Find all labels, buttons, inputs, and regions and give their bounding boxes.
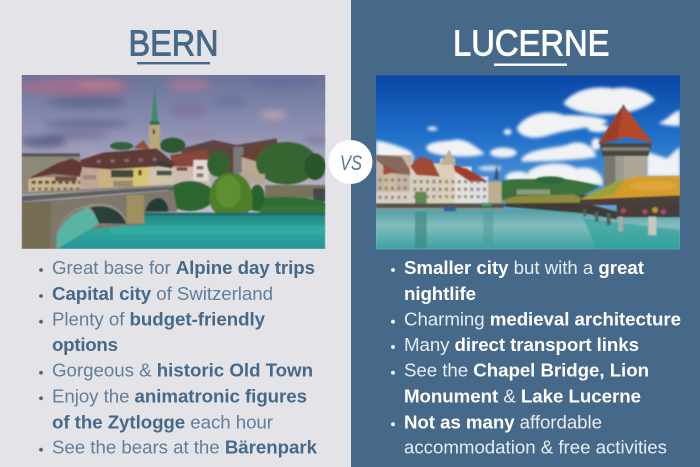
list: Lucerne highlights: nightlife	[404, 283, 476, 304]
main roofs	[27, 158, 83, 179]
panel: Bern	[22, 30, 326, 458]
bushes	[166, 181, 214, 211]
heading: Bern: BERN	[128, 22, 218, 64]
list: Bern highlights: Capital city of Switzerland	[52, 283, 273, 304]
river	[22, 213, 325, 249]
hills	[500, 177, 600, 200]
background trees	[110, 142, 133, 150]
list: Lucerne highlights: Charming medieval architecture	[404, 309, 681, 330]
VS badge: VS	[340, 152, 362, 175]
lake	[376, 209, 680, 249]
list: Bern highlights: Plenty of budget-friendly	[52, 309, 266, 330]
list: Lucerne highlights	[391, 257, 681, 458]
town buildings	[376, 155, 413, 207]
VS badge	[328, 140, 372, 184]
list: Bern highlights: options	[52, 334, 118, 355]
willow	[209, 173, 253, 217]
list: Bern highlights: Enjoy the animatronic figures	[52, 385, 307, 406]
list: Bern highlights: See the bears at the Bärenpark	[52, 437, 318, 458]
bridge	[22, 190, 177, 249]
tower	[149, 124, 160, 149]
right group	[173, 165, 210, 185]
list: Lucerne highlights: accommodation & free activities	[404, 437, 667, 458]
main facades	[28, 177, 82, 194]
list: Bern highlights: of the Zytlogge each hour	[52, 411, 273, 432]
bridge piers	[648, 217, 656, 235]
list: Lucerne highlights: Many direct transport links	[404, 334, 639, 355]
list: Bern highlights: Great base for Alpine day trips	[52, 257, 315, 278]
list: Bern highlights: Gorgeous & historic Old Town	[52, 360, 313, 381]
back buildings	[180, 138, 280, 175]
tower	[614, 155, 625, 182]
list: Lucerne highlights: Smaller city but with a great	[404, 257, 644, 278]
big trees	[207, 151, 230, 177]
panel: Lucerne	[351, 0, 700, 467]
far wall	[22, 155, 80, 192]
photo: Bern old town and river	[17, 75, 330, 249]
list: Lucerne highlights: See the Chapel Bridge, Lion	[404, 360, 649, 381]
list: Lucerne highlights: Not as many affordable	[404, 411, 602, 432]
near covered bridge	[580, 195, 680, 205]
photo: Lucerne Chapel Bridge and lake	[376, 75, 680, 249]
long covered bridge	[505, 194, 583, 204]
heading: Lucerne: LUCERNE	[453, 22, 610, 64]
heading underline: Bern	[137, 62, 210, 64]
heading underline: Lucerne	[494, 64, 567, 66]
list: Bern highlights	[39, 257, 318, 458]
list: Lucerne highlights: Monument & Lake Lucerne	[404, 385, 641, 406]
